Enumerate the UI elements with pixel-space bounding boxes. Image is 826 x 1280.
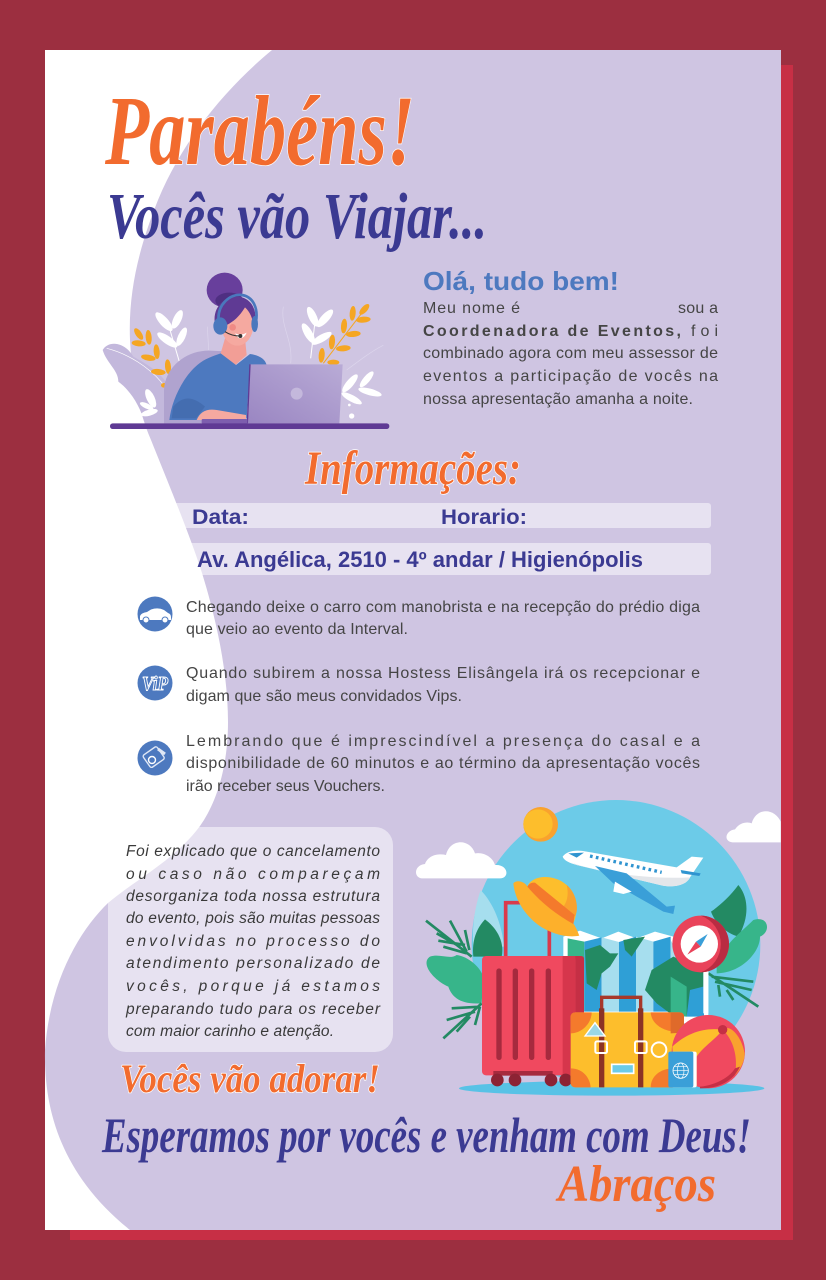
orange leaves left bbox=[131, 327, 172, 388]
text: hostess: digam que são meus convidados Vips. bbox=[186, 688, 462, 705]
text: hostess bbox=[186, 665, 700, 705]
date and time bar: Data: bbox=[192, 506, 249, 529]
intro paragraph: Meu nome é bbox=[423, 300, 520, 317]
text: reminder: disponibilidade de 60 minutos e ao término da apresentação vocês bbox=[186, 755, 700, 772]
icon: voucher bbox=[138, 740, 172, 776]
orange leaves right bbox=[318, 302, 371, 365]
chair bbox=[164, 351, 230, 423]
intro heading: Olá, tudo bem! bbox=[423, 266, 619, 296]
white leaves right bbox=[299, 305, 382, 419]
text: parking: que veio ao evento da Interval. bbox=[186, 621, 408, 638]
hat bbox=[513, 877, 579, 936]
title: Parabéns: Parabéns! bbox=[104, 75, 415, 186]
yellow suitcase bbox=[571, 997, 684, 1087]
icon: VIP bbox=[138, 666, 172, 700]
headset bbox=[218, 295, 257, 322]
callout: cancellation note: preparando tudo para os receber bbox=[125, 1001, 381, 1018]
intro paragraph: nossa apresentação amanha a noite. bbox=[423, 391, 693, 408]
text: reminder: Lembrando que é imprescindível a presença do casal e a bbox=[186, 733, 700, 750]
intro paragraph: eventos a participação de vocês na bbox=[423, 368, 718, 385]
callout: cancellation note: com maior carinho e atenção. bbox=[126, 1023, 334, 1040]
intro paragraph bbox=[423, 300, 718, 408]
beach ball bbox=[672, 1015, 745, 1088]
callout: cancellation note bbox=[108, 827, 393, 1052]
text: reminder: irão receber seus Vouchers. bbox=[186, 778, 385, 795]
date and time bar bbox=[170, 503, 711, 529]
icon: car bbox=[138, 596, 172, 632]
callout: cancellation note: vocês, porque já estamos bbox=[126, 978, 380, 995]
intro paragraph: sou a bbox=[678, 300, 718, 317]
airplane bbox=[563, 851, 703, 914]
callout: cancellation note: envolvidas no processo do bbox=[126, 933, 380, 950]
callout: cancellation note: Foi explicado que o cancelamento bbox=[126, 843, 380, 860]
clouds bbox=[416, 842, 506, 878]
shirt bbox=[169, 353, 267, 420]
text: reminder bbox=[186, 733, 700, 795]
tropical leaves bbox=[426, 885, 767, 1038]
map bbox=[563, 931, 708, 1023]
compass bbox=[672, 916, 729, 1013]
red suitcase bbox=[482, 903, 584, 1086]
illustration: woman with headset at laptop bbox=[103, 273, 389, 429]
text: parking: Chegando deixe o carro com manobrista e na recepção do prédio diga bbox=[186, 599, 700, 616]
text: Vocês vão adorar: Vocês vão adorar! bbox=[120, 1056, 380, 1101]
intro paragraph: combinado agora com meu assessor de bbox=[423, 345, 718, 362]
callout: cancellation note: do evento, pois são muitas pessoas bbox=[126, 910, 380, 927]
hair bun bbox=[207, 273, 243, 307]
address bar bbox=[170, 543, 711, 575]
callout: cancellation note: atendimento personalizado de bbox=[126, 955, 380, 972]
sky circle bbox=[472, 800, 760, 1089]
ground shadow bbox=[459, 1081, 764, 1096]
callout: cancellation note: ou caso não compareçam bbox=[126, 866, 380, 883]
text: parking bbox=[186, 599, 700, 638]
address bar: Av. Angélica, 2510 - 4º andar / Higienópolis bbox=[197, 547, 643, 572]
white leaves left bbox=[139, 309, 189, 418]
passport bbox=[668, 1052, 697, 1087]
sun bbox=[523, 807, 558, 842]
date and time bar: Horario: bbox=[441, 506, 527, 529]
intro paragraph: Coordenadora de Eventos, bbox=[423, 323, 681, 340]
text: hostess: Quando subirem a nossa Hostess Elisângela irá os recepcionar e bbox=[186, 665, 700, 682]
subtitle: Vocês vão Viajar: Vocês vão Viajar... bbox=[107, 180, 487, 253]
heading: Informações: Informações: bbox=[304, 442, 521, 495]
desk bbox=[110, 423, 389, 429]
illustration: travel scene bbox=[416, 800, 781, 1096]
callout: cancellation note: desorganiza toda nossa estrutura bbox=[126, 888, 380, 905]
laptop bbox=[247, 364, 343, 423]
signature: Abraços: Abraços bbox=[555, 1156, 716, 1213]
icon: VIP: ViP bbox=[142, 673, 169, 695]
neck and face bbox=[221, 338, 247, 365]
intro paragraph: foi bbox=[691, 323, 718, 340]
